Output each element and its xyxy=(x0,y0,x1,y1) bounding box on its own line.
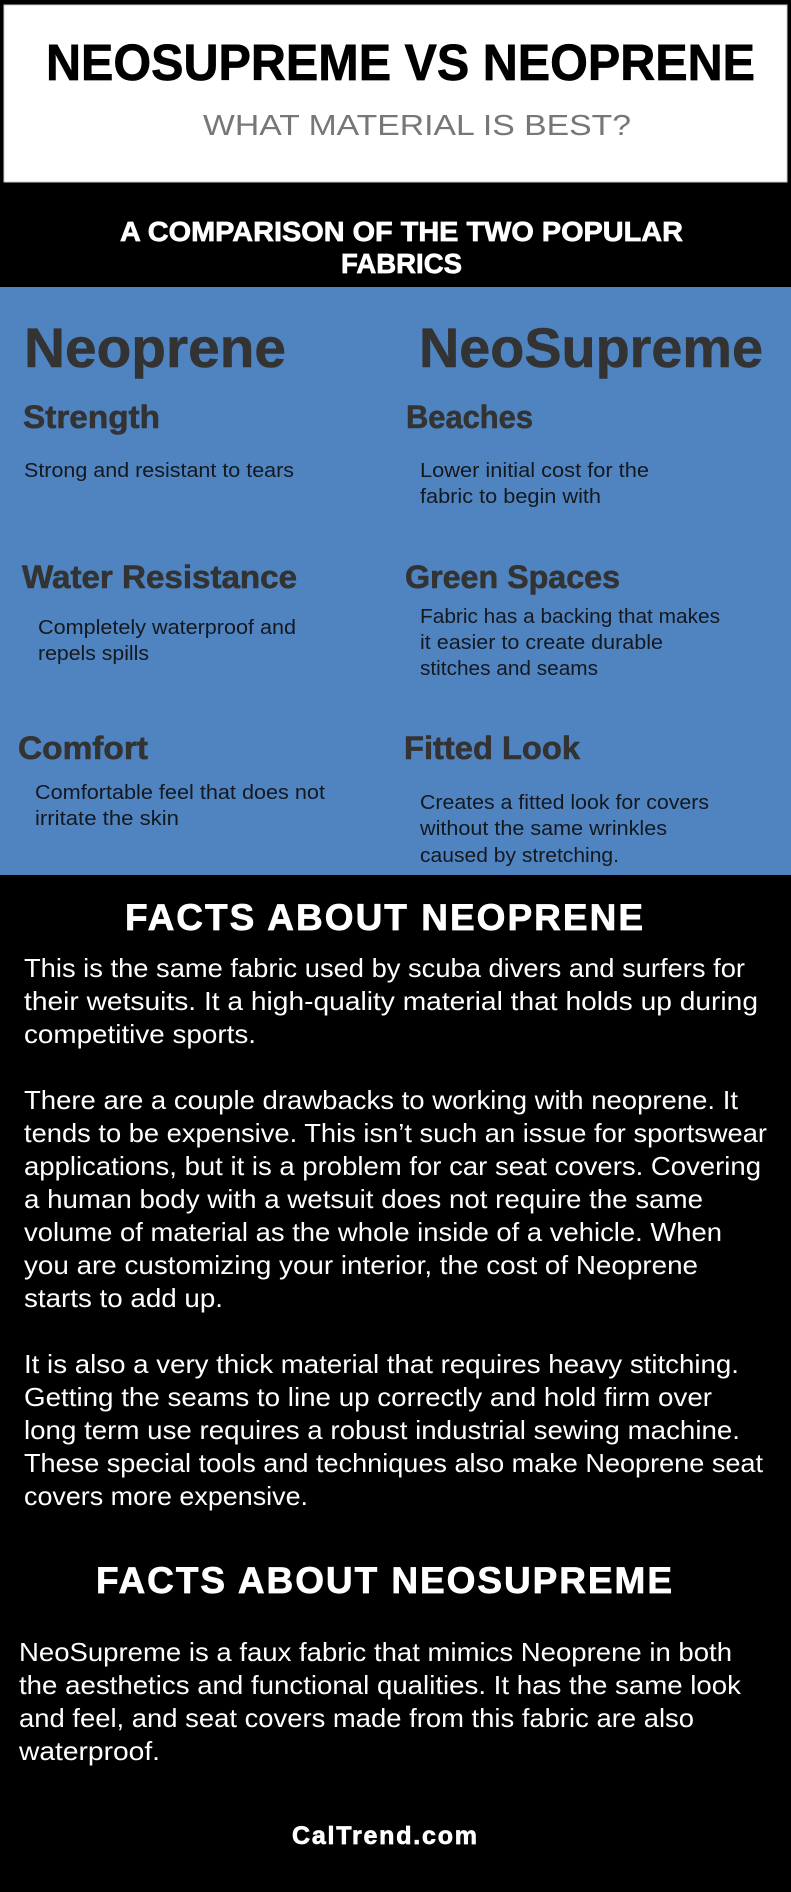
text block: neoprene paragraph 3: covers more expensive. xyxy=(24,1481,308,1511)
item: Water Resistance: repels spills xyxy=(38,643,149,665)
item: Comfort xyxy=(18,730,325,830)
item: Green Spaces xyxy=(405,559,720,680)
panel: comparison xyxy=(0,287,791,875)
item: Green Spaces: Fabric has a backing that makes xyxy=(420,606,720,628)
item: Green Spaces: it easier to create durable xyxy=(420,632,663,654)
item: Water Resistance: Water Resistance xyxy=(22,559,297,595)
text block: neoprene paragraph 2: There are a couple drawbacks to working with neoprene. It xyxy=(24,1085,739,1115)
text block: neosupreme paragraph xyxy=(18,1637,742,1766)
text block: neoprene paragraph 2: tends to be expensive. This isn’t such an issue for sportswear xyxy=(24,1118,767,1148)
comparison heading: A COMPARISON OF THE TWO POPULAR xyxy=(120,216,683,247)
item: Fitted Look: without the same wrinkles xyxy=(419,818,667,840)
text block: neoprene paragraph 2: volume of material as the whole inside of a vehicle. When xyxy=(24,1217,722,1247)
text block: neoprene paragraph 2 xyxy=(24,1085,767,1313)
item: Comfort: irritate the skin xyxy=(35,808,179,830)
text block: neoprene paragraph 3: It is also a very thick material that requires heavy stitching. xyxy=(24,1349,739,1379)
text block: neosupreme paragraph: and feel, and seat covers made from this fabric are also xyxy=(19,1703,694,1733)
text block: neosupreme paragraph: NeoSupreme is a faux fabric that mimics Neoprene in both xyxy=(19,1637,732,1667)
text block: neoprene paragraph 3: long term use requires a robust industrial sewing machine. xyxy=(24,1415,740,1445)
column heading: Neoprene: Neoprene xyxy=(24,316,286,379)
text block: neoprene paragraph 3 xyxy=(24,1349,764,1511)
item: Fitted Look: Creates a fitted look for covers xyxy=(420,792,709,814)
header panel xyxy=(4,5,787,182)
text block: neoprene paragraph 1: competitive sports. xyxy=(24,1019,256,1049)
item: Fitted Look: caused by stretching. xyxy=(420,845,619,867)
item: Beaches xyxy=(406,399,649,508)
text block: neoprene paragraph 3: Getting the seams to line up correctly and hold firm over xyxy=(24,1382,712,1412)
item: Water Resistance: Completely waterproof and xyxy=(38,617,296,639)
title: NEOSUPREME VS NEOPRENE xyxy=(46,34,755,91)
item: Beaches: fabric to begin with xyxy=(420,486,601,508)
item: Beaches: Beaches xyxy=(406,399,533,435)
text block: neoprene paragraph 1: This is the same fabric used by scuba divers and surfers for xyxy=(24,953,745,983)
text block: neoprene paragraph 1: their wetsuits. It a high-quality material that holds up during xyxy=(24,986,758,1016)
item: Fitted Look xyxy=(404,730,709,867)
item: Strength: Strong and resistant to tears xyxy=(24,460,294,482)
item: Fitted Look: Fitted Look xyxy=(404,730,580,766)
comparison heading xyxy=(120,216,683,279)
text block: neoprene paragraph 2: starts to add up. xyxy=(24,1283,223,1313)
comparison heading: FABRICS xyxy=(341,248,462,279)
subtitle: WHAT MATERIAL IS BEST? xyxy=(203,110,631,142)
heading: facts about neosupreme: FACTS ABOUT NEOSUPREME xyxy=(96,1560,672,1601)
item: Water Resistance xyxy=(22,559,297,665)
item: Strength xyxy=(23,399,294,482)
column heading: NeoSupreme: NeoSupreme xyxy=(419,316,763,379)
item: Green Spaces: Green Spaces xyxy=(405,559,620,595)
heading: facts about neoprene: FACTS ABOUT NEOPRENE xyxy=(125,897,643,938)
text block: neoprene paragraph 1 xyxy=(24,953,758,1049)
item: Green Spaces: stitches and seams xyxy=(420,658,598,680)
text block: neosupreme paragraph: waterproof. xyxy=(18,1736,160,1766)
text block: neoprene paragraph 2: applications, but it is a problem for car seat covers. Covering xyxy=(24,1151,761,1181)
text block: neoprene paragraph 2: a human body with a wetsuit does not require the same xyxy=(24,1184,703,1214)
item: Beaches: Lower initial cost for the xyxy=(420,460,649,482)
item: Comfort: Comfort xyxy=(18,730,148,766)
text block: neoprene paragraph 3: These special tools and techniques also make Neoprene seat xyxy=(24,1448,764,1478)
item: Strength: Strength xyxy=(23,399,160,435)
text block: neosupreme paragraph: the aesthetics and functional qualities. It has the same look xyxy=(19,1670,742,1700)
footer: source: CalTrend.com xyxy=(292,1822,477,1850)
item: Comfort: Comfortable feel that does not xyxy=(35,782,325,804)
text block: neoprene paragraph 2: you are customizing your interior, the cost of Neoprene xyxy=(24,1250,698,1280)
